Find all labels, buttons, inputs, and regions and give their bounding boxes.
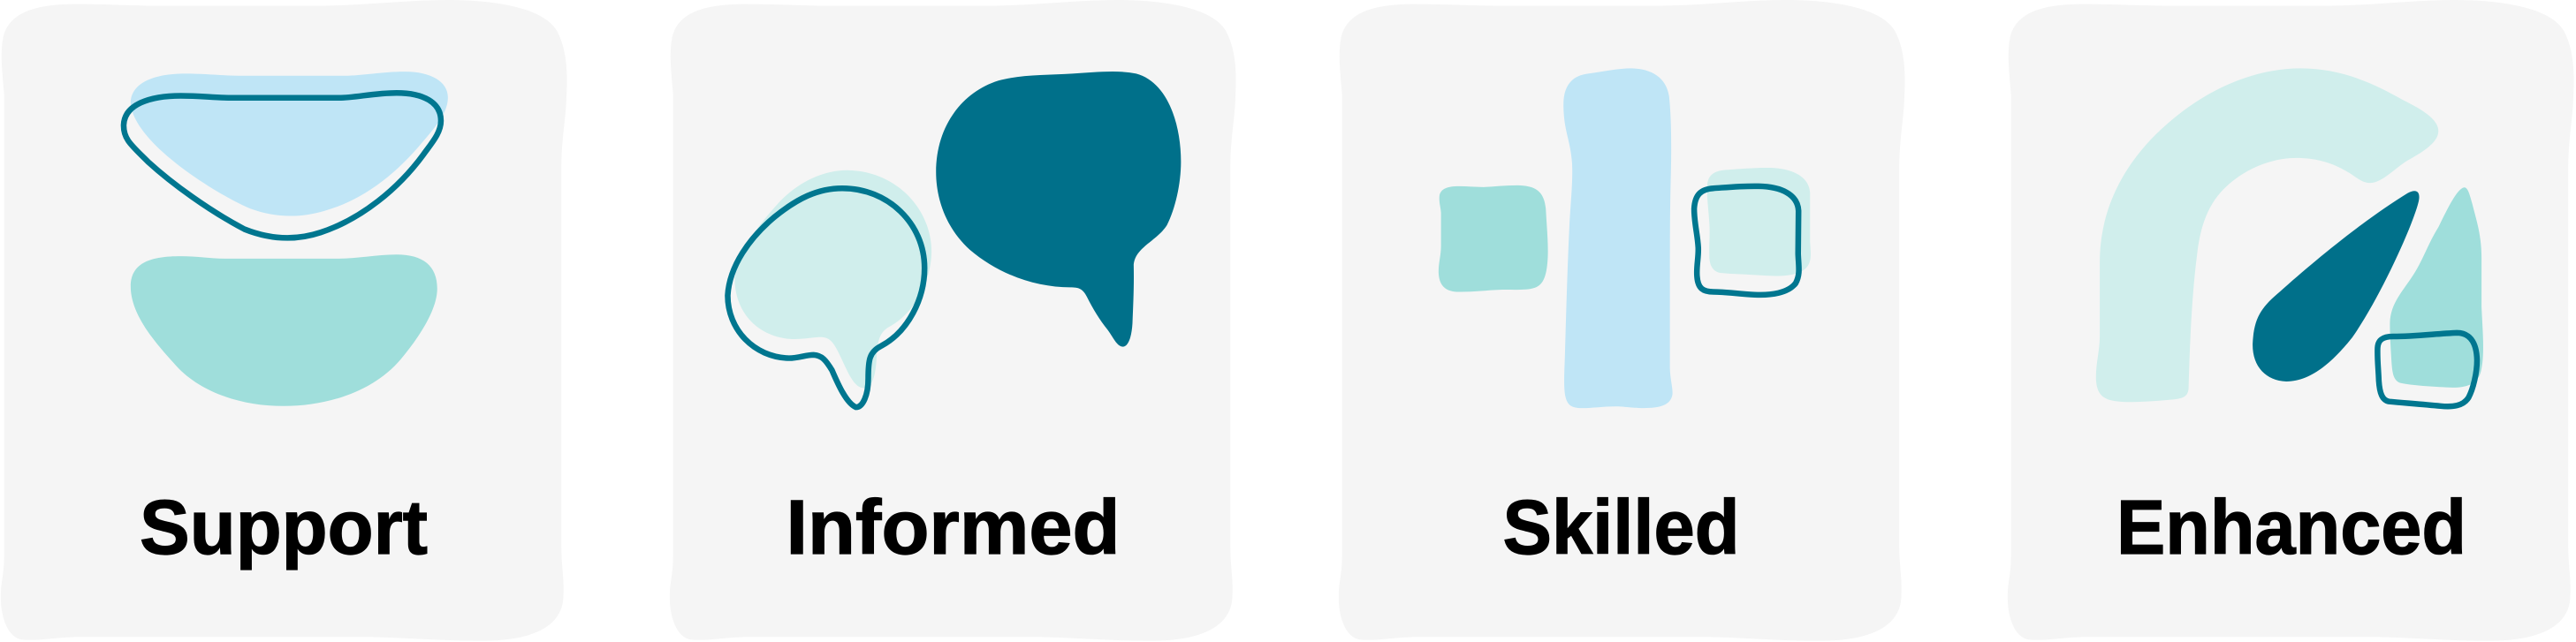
icon: two cupped hands bbox=[124, 72, 448, 406]
heading: Informed: Informed bbox=[786, 485, 1121, 570]
panel background: Enhanced bbox=[2008, 0, 2574, 641]
panel: Informed bbox=[670, 0, 1236, 641]
panel: Skilled bbox=[1339, 0, 1905, 641]
heading: Support: Support bbox=[140, 485, 428, 570]
heading: Enhanced: Enhanced bbox=[2116, 485, 2466, 570]
panel: Support bbox=[1, 0, 567, 641]
heading: Skilled: Skilled bbox=[1502, 485, 1739, 570]
icon: two speech bubbles bbox=[727, 72, 1181, 407]
panel: Enhanced bbox=[2008, 0, 2574, 641]
panel background: Skilled bbox=[1339, 0, 1905, 641]
panel background: Support bbox=[1, 0, 567, 641]
icon: bar and squares bbox=[1439, 68, 1811, 408]
panel background: Informed bbox=[670, 0, 1236, 641]
icon: gauge with needle bbox=[2096, 68, 2483, 406]
